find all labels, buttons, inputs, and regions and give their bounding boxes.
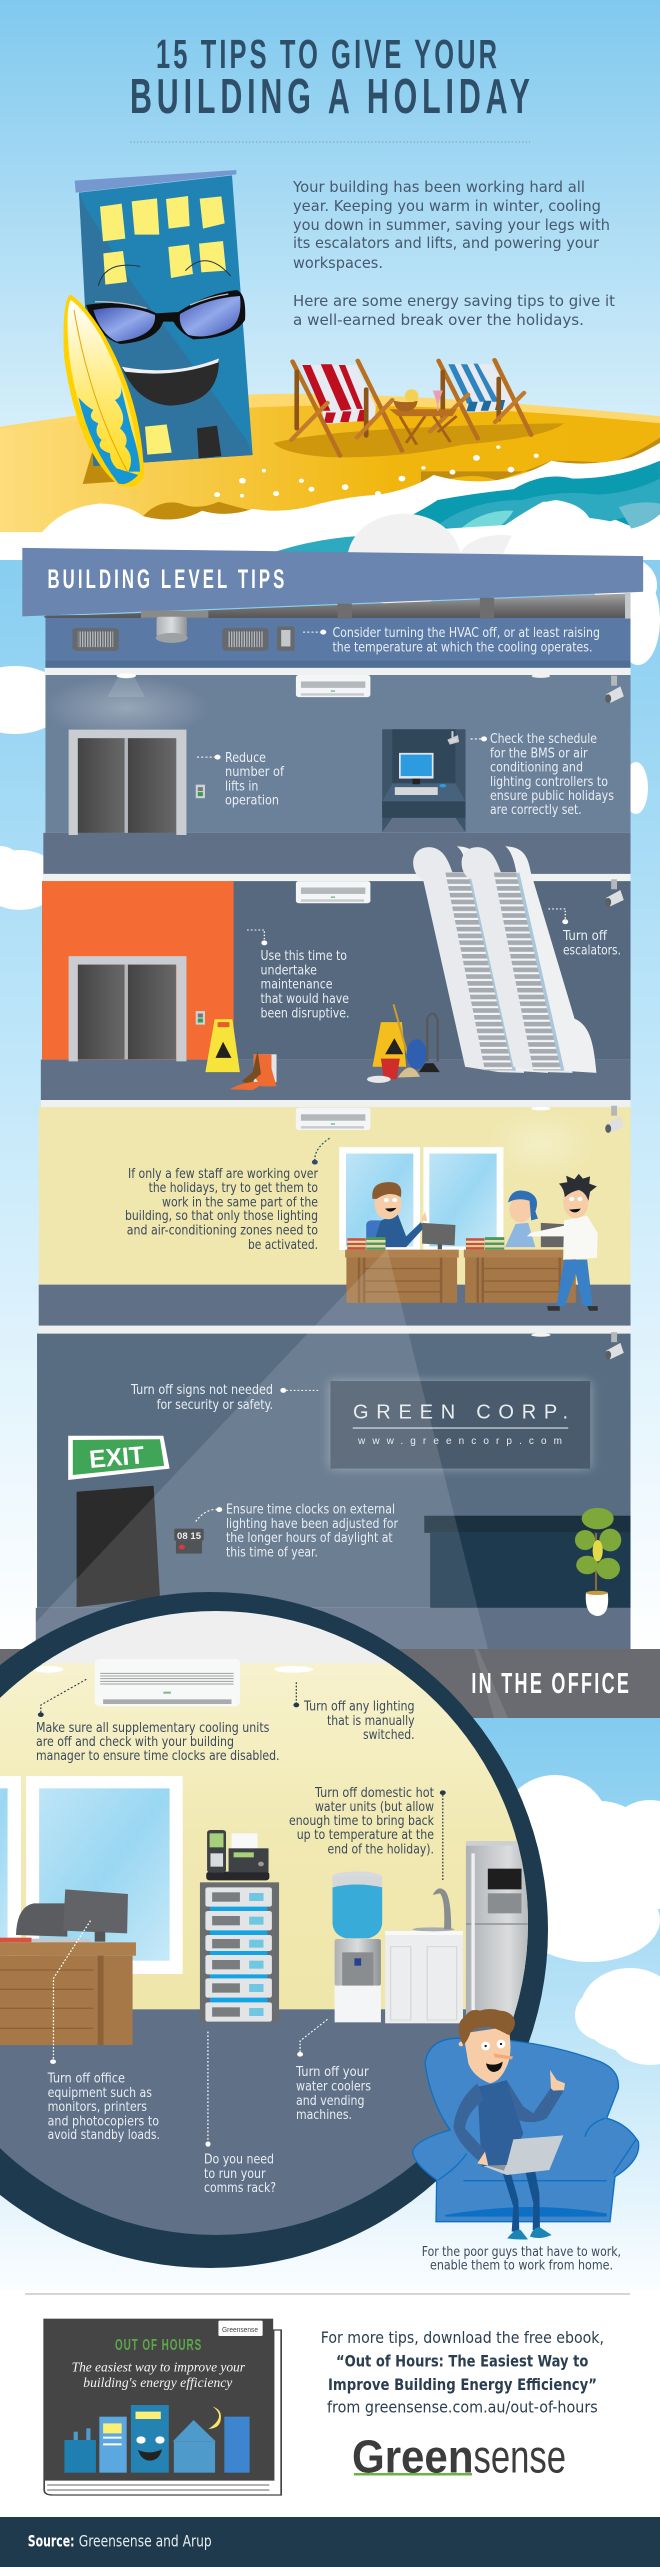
office tip text: dark: water units (but allow: [315, 1799, 434, 1815]
icon: desk 2: [464, 1237, 577, 1303]
building tip text: Use this time to: [260, 948, 347, 964]
arrow: hvac: [303, 630, 326, 635]
office staff tip: If only a few staff are working over: [128, 1166, 318, 1182]
building tip text: that would have: [260, 991, 349, 1007]
building tip text: Turn off: [562, 928, 608, 944]
panel: floor with lifts and BMS: [42, 668, 631, 874]
icon: potted plant: [575, 1508, 621, 1616]
building tip text: been disruptive.: [260, 1006, 350, 1022]
icon: cabinets and tap: [385, 1888, 463, 2023]
pipe: [43, 594, 631, 618]
ebook cover text: OUT OF HOURS: [115, 2336, 201, 2354]
ebook download text: Improve Building Energy Efficiency”: [328, 2375, 597, 2394]
wet sand edge: [143, 437, 660, 532]
icon: duct fitting: [156, 617, 188, 643]
arrow: escalators: [548, 909, 568, 924]
lobby tips: Turn off signs not needed: [130, 1382, 273, 1398]
icon: monitor: [422, 1223, 455, 1249]
office tip text: light: comms rack?: [204, 2180, 276, 2196]
arrow: schedule: [471, 736, 487, 741]
icon: exit sign: [68, 1436, 170, 1480]
ebook download text: For more tips, download the free ebook,: [321, 2328, 604, 2347]
arrow: water coolers: [297, 2019, 327, 2057]
Greensense logo: Green: [352, 2431, 474, 2483]
icon: paint tin and brush: [229, 1051, 277, 1090]
office tip text: light: [47, 2064, 371, 2196]
office tip text: dark: switched.: [363, 1727, 415, 1743]
office tip text: dark: are off and check with your building: [36, 1734, 234, 1750]
legs: [502, 2170, 540, 2232]
lobby tips: [130, 1382, 398, 1561]
office tip text: light: avoid standby loads.: [48, 2127, 160, 2143]
icon: lift: [69, 956, 205, 1061]
icon: escalators: [413, 846, 596, 1073]
work from home tip: [422, 2244, 621, 2274]
work from home tip: enable them to work from home.: [430, 2258, 613, 2274]
office tip text: light: machines.: [296, 2107, 352, 2123]
in the office heading: IN THE OFFICE: [471, 1668, 629, 1700]
building tip text: Check the schedule: [490, 731, 597, 747]
icon: thermostat: [277, 626, 295, 651]
building tip text: number of: [225, 764, 285, 780]
arrow: maintenance: [247, 930, 267, 945]
company sign text: www.greencorp.com: [357, 1436, 562, 1447]
office tip text: dark: Turn off any lighting: [303, 1699, 415, 1715]
company sign text: GREEN CORP.: [353, 1402, 568, 1424]
lobby tips: the longer hours of daylight at: [226, 1530, 393, 1546]
building tip text: Consider turning the HVAC off, or at least raising: [332, 625, 600, 641]
building level tips heading: BUILDING LEVEL TIPS: [47, 564, 284, 594]
icon: ebook: [43, 2319, 281, 2495]
sea: [349, 461, 660, 553]
office tip text: dark: [36, 1699, 434, 1858]
office staff tip: and air-conditioning zones need to: [127, 1223, 318, 1239]
office tip text: light: monitors, printers: [48, 2099, 147, 2115]
lobby tips: this time of year.: [226, 1545, 318, 1561]
icon: fridge: [466, 1841, 528, 2018]
icon: red deck chair: [291, 361, 402, 456]
icon: comms rack: [200, 1882, 279, 2022]
ebook download text: from greensense.com.au/out-of-hours: [327, 2398, 598, 2417]
intro text: Your building has been working hard all: [292, 178, 585, 196]
office tip text: light: Turn off office: [47, 2071, 125, 2087]
icon: air conditioner: [95, 1659, 240, 1706]
lobby tips: lighting have been adjusted for: [226, 1516, 398, 1532]
office tip text: dark: end of the holiday).: [328, 1842, 434, 1858]
intro text: workspaces.: [293, 254, 383, 272]
icon: surfboard: [63, 294, 144, 487]
building tip text: for the BMS or air: [490, 746, 588, 762]
foam: [0, 443, 660, 560]
footer source bar: [0, 2517, 660, 2567]
office tip text: light: and vending: [296, 2093, 364, 2109]
icon: monitor 2: [541, 1223, 565, 1247]
office staff tip: be activated.: [248, 1237, 318, 1253]
building tip text: conditioning and: [490, 759, 583, 775]
Greensense logo: sense: [474, 2431, 566, 2483]
arrow: lighting: [293, 1682, 299, 1707]
office tip text: dark: Turn off domestic hot: [314, 1785, 434, 1801]
office tip text: light: Do you need: [204, 2152, 274, 2168]
office tip text: light: and photocopiers to: [48, 2114, 159, 2130]
icon: exit door: [77, 1486, 160, 1607]
icon: lift: [69, 730, 205, 835]
icon: printer and monitor: [0, 1889, 128, 1942]
office tip text: dark: enough time to bring back: [289, 1813, 434, 1829]
in the office band: [0, 1649, 660, 1718]
arrow: office equipment: [50, 1921, 90, 2064]
arrow: comms rack: [207, 2032, 209, 2140]
ebook cover text: Greensense: [222, 2327, 258, 2334]
panel: staff office floor: [39, 1100, 631, 1326]
side clouds: [0, 557, 660, 2065]
icon: sofa: [413, 2038, 639, 2222]
intro text: [292, 178, 615, 329]
building tip text: [225, 625, 621, 1022]
office tip text: light: to run your: [204, 2166, 266, 2182]
office circle ring: [0, 1592, 548, 2268]
exit sign text: EXIT: [88, 1441, 145, 1474]
icon: man on sofa with laptop: [413, 2009, 639, 2240]
icon: side table with drinks: [389, 389, 457, 445]
icon: water cooler: [332, 1871, 382, 2022]
office staff tip: work in the same part of the: [162, 1194, 318, 1210]
far clouds: [347, 514, 461, 606]
office tip text: light: equipment such as: [48, 2085, 152, 2101]
icon: smile: [122, 358, 219, 406]
ebook download text: [321, 2328, 604, 2417]
office tip text: dark: Make sure all supplementary cooling units: [36, 1720, 269, 1736]
icon: sunglasses: [86, 290, 245, 344]
office staff tip: building, so that only those lighting: [125, 1208, 318, 1224]
office tip text: dark: that is manually: [327, 1713, 415, 1729]
title: [130, 32, 530, 124]
time clock digits: 08 15: [177, 1531, 202, 1542]
ebook buildings: [64, 2405, 250, 2473]
icon: air vent 2: [222, 628, 269, 651]
office tip text: dark: up to temperature at the: [297, 1827, 434, 1843]
icon: fax and phone: [206, 1830, 269, 1880]
footer source bar: Source:: [28, 2532, 74, 2551]
laptop: [483, 2135, 563, 2175]
icon: standing man: [527, 1174, 598, 1311]
title: BUILDING A HOLIDAY: [130, 69, 530, 124]
lobby tips: for security or safety.: [157, 1397, 273, 1413]
comms rack dot: [205, 2141, 211, 2147]
arrow: lifts: [197, 755, 221, 760]
ebook cover text: [72, 2327, 258, 2390]
panel: building level tips: [22, 548, 643, 1650]
office tip text: dark: manager to ensure time clocks are disabled.: [36, 1748, 280, 1764]
icon: building character with surfboard: [63, 170, 253, 487]
intro text: you down in summer, saving your legs with: [293, 216, 610, 234]
arrow: office: [312, 1138, 330, 1165]
building tip text: operation: [225, 793, 279, 809]
building tip text: the temperature at which the cooling operates.: [332, 639, 592, 655]
head: [463, 2027, 510, 2083]
company sign text: [353, 1402, 568, 1447]
deck chairs and table: [291, 360, 531, 456]
icon: seated woman: [505, 1190, 538, 1247]
icon: blue deck chair: [430, 360, 531, 439]
ebook download text: “Out of Hours: The Easiest Way to: [336, 2352, 588, 2371]
office tip text: light: water coolers: [296, 2079, 371, 2095]
icon: windows: [339, 1147, 503, 1250]
icon: cleaning equipment: [367, 1004, 440, 1083]
arrow: hot water: [440, 1790, 446, 1880]
lobby tips: Ensure time clocks on external: [226, 1502, 395, 1518]
icon: caution sign: [205, 1019, 240, 1072]
intro text: a well-earned break over the holidays.: [293, 311, 584, 329]
sea spray: [214, 445, 539, 497]
icon: windows: [0, 1776, 183, 1974]
panel: office interior: [0, 1611, 528, 2235]
building tip text: lighting controllers to: [490, 774, 608, 790]
title: 15 TIPS TO GIVE YOUR: [156, 32, 497, 78]
icon: time clock: [174, 1529, 204, 1554]
office staff tip: [125, 1166, 318, 1253]
icon: company sign: [330, 1381, 590, 1469]
arrow: signs: [280, 1388, 320, 1393]
icon: seated man: [366, 1182, 427, 1247]
building tip text: maintenance: [260, 977, 332, 993]
icon: desk: [0, 1942, 136, 2045]
arrow: cooling units: [38, 1679, 86, 1717]
divider: [25, 2293, 630, 2295]
ebook cover text: The easiest way to improve your: [72, 2360, 246, 2375]
intro text: Here are some energy saving tips to give it: [293, 292, 615, 310]
footer source bar: Greensense and Arup: [79, 2532, 212, 2551]
icon: reception desk: [424, 1516, 631, 1608]
building tip text: are correctly set.: [490, 802, 582, 818]
panel: lobby floor: [36, 1249, 631, 1650]
light beam: [36, 1249, 488, 1650]
building tip text: Reduce: [225, 750, 266, 766]
icon: air vent: [72, 628, 119, 651]
building tip text: escalators.: [563, 943, 621, 959]
ebook cover text: building's energy efficiency: [83, 2375, 232, 2390]
office tip text: light: Turn off your: [295, 2064, 369, 2080]
shirt: [477, 2080, 523, 2167]
building tip text: undertake: [260, 963, 317, 979]
intro text: year. Keeping you warm in winter, cooling: [293, 197, 601, 215]
icon: BMS workstation: [382, 729, 466, 832]
panel: roof and HVAC floor: [22, 548, 643, 668]
arrow: time clock: [196, 1507, 222, 1521]
building tip text: lifts in: [225, 779, 258, 795]
beach scene: [0, 394, 660, 606]
Greensense logo: [352, 2431, 566, 2483]
icon: desk: [345, 1237, 459, 1303]
panel: maintenance floor: [41, 846, 631, 1100]
office staff tip: the holidays, try to get them to: [149, 1180, 318, 1196]
intro text: its escalators and lifts, and powering your: [293, 234, 600, 252]
building tip text: ensure public holidays: [490, 788, 614, 804]
